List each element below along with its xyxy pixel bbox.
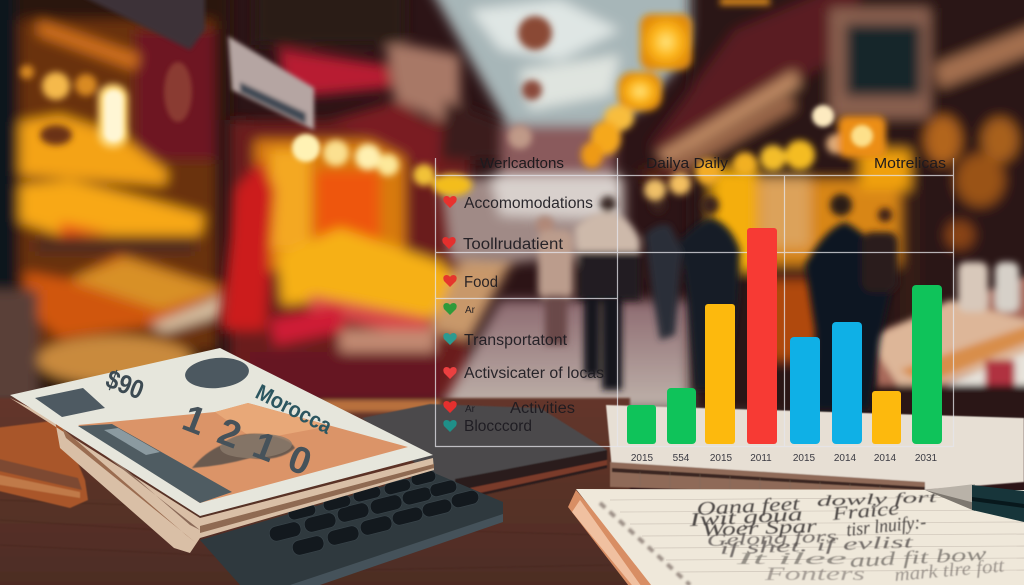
central stall and awning bbox=[220, 0, 515, 404]
handwriting: tisr lnuify:- bbox=[845, 512, 927, 541]
bar chart bbox=[627, 228, 942, 464]
row labels: Ar bbox=[465, 404, 476, 415]
notebook spiral marks bbox=[600, 503, 690, 585]
dark oval bbox=[184, 355, 250, 391]
calculator keys bbox=[268, 469, 480, 557]
row labels: Food bbox=[464, 274, 498, 291]
handwriting: Woer Spar bbox=[701, 516, 818, 541]
stacked notes bbox=[10, 398, 434, 553]
open notebook with handwriting bbox=[568, 489, 1024, 585]
handwriting: Iwit goua bbox=[688, 504, 803, 531]
handwriting: if shet. if evlist bbox=[719, 532, 915, 558]
table warm edge bbox=[320, 400, 440, 412]
budget table overlay bbox=[435, 155, 954, 447]
grey strip bbox=[78, 424, 232, 503]
column headings: Werlcadtons bbox=[480, 155, 564, 172]
note amounts: $90 bbox=[102, 365, 148, 406]
orange note panel bbox=[78, 403, 408, 503]
year labels: 2014 bbox=[834, 453, 857, 464]
row labels: Accomomodations bbox=[464, 195, 593, 212]
handwriting: dowly fort bbox=[817, 490, 939, 510]
orange leather wallet bbox=[0, 420, 88, 508]
blurred shoppers bbox=[536, 194, 898, 410]
row labels: Activities bbox=[510, 400, 575, 417]
right side shops bbox=[650, 0, 1024, 415]
row labels: Ar bbox=[465, 305, 476, 316]
dark square bbox=[35, 388, 105, 417]
year labels: 2031 bbox=[915, 453, 938, 464]
right table with bottles bbox=[868, 262, 1024, 420]
floor and skylight bbox=[420, 0, 870, 410]
calculator bbox=[200, 469, 503, 585]
year labels: 2014 bbox=[874, 453, 897, 464]
handwriting: Gelong fors bbox=[706, 526, 838, 550]
wooden table top bbox=[0, 398, 630, 585]
lanterns and bokeh lights bbox=[20, 0, 886, 201]
sign board bbox=[70, 0, 314, 130]
handwriting: It ilee bbox=[734, 549, 848, 568]
notebook with spiral bbox=[606, 405, 1024, 497]
handwriting: Fraice bbox=[830, 498, 900, 525]
year labels: 554 bbox=[673, 453, 690, 464]
banknote stack bbox=[10, 348, 434, 553]
year labels bbox=[631, 453, 938, 464]
dark wallet bbox=[362, 404, 607, 496]
year labels: 2015 bbox=[631, 453, 654, 464]
portrait bbox=[192, 432, 295, 468]
banknote stack: Morocca bbox=[252, 379, 337, 439]
bars bbox=[627, 228, 942, 444]
handwriting bbox=[688, 490, 1006, 585]
year labels: 2011 bbox=[750, 453, 772, 464]
row labels bbox=[463, 195, 604, 435]
column headings: Dailya Daily bbox=[646, 155, 729, 172]
column headings bbox=[480, 155, 946, 172]
handwriting: Oana feet bbox=[696, 494, 801, 520]
table grid lines bbox=[435, 158, 954, 447]
handwriting: Fonters bbox=[763, 564, 865, 585]
year labels: 2015 bbox=[793, 453, 816, 464]
row labels: Toollrudatient bbox=[463, 236, 564, 253]
table grain bbox=[0, 500, 610, 570]
row labels: Transportatont bbox=[464, 332, 568, 349]
row labels: Blocccord bbox=[464, 418, 532, 435]
banknote stack: 1210 bbox=[177, 397, 317, 484]
column headings: Motrelicas bbox=[874, 155, 946, 172]
row labels: Activsicater of locas bbox=[464, 365, 604, 382]
pen bbox=[925, 484, 1024, 522]
top note bbox=[10, 348, 433, 516]
market left stall bbox=[0, 0, 250, 410]
handwriting: aud fit bow bbox=[849, 544, 988, 572]
year labels: 2015 bbox=[710, 453, 733, 464]
row heart icons bbox=[442, 196, 457, 432]
